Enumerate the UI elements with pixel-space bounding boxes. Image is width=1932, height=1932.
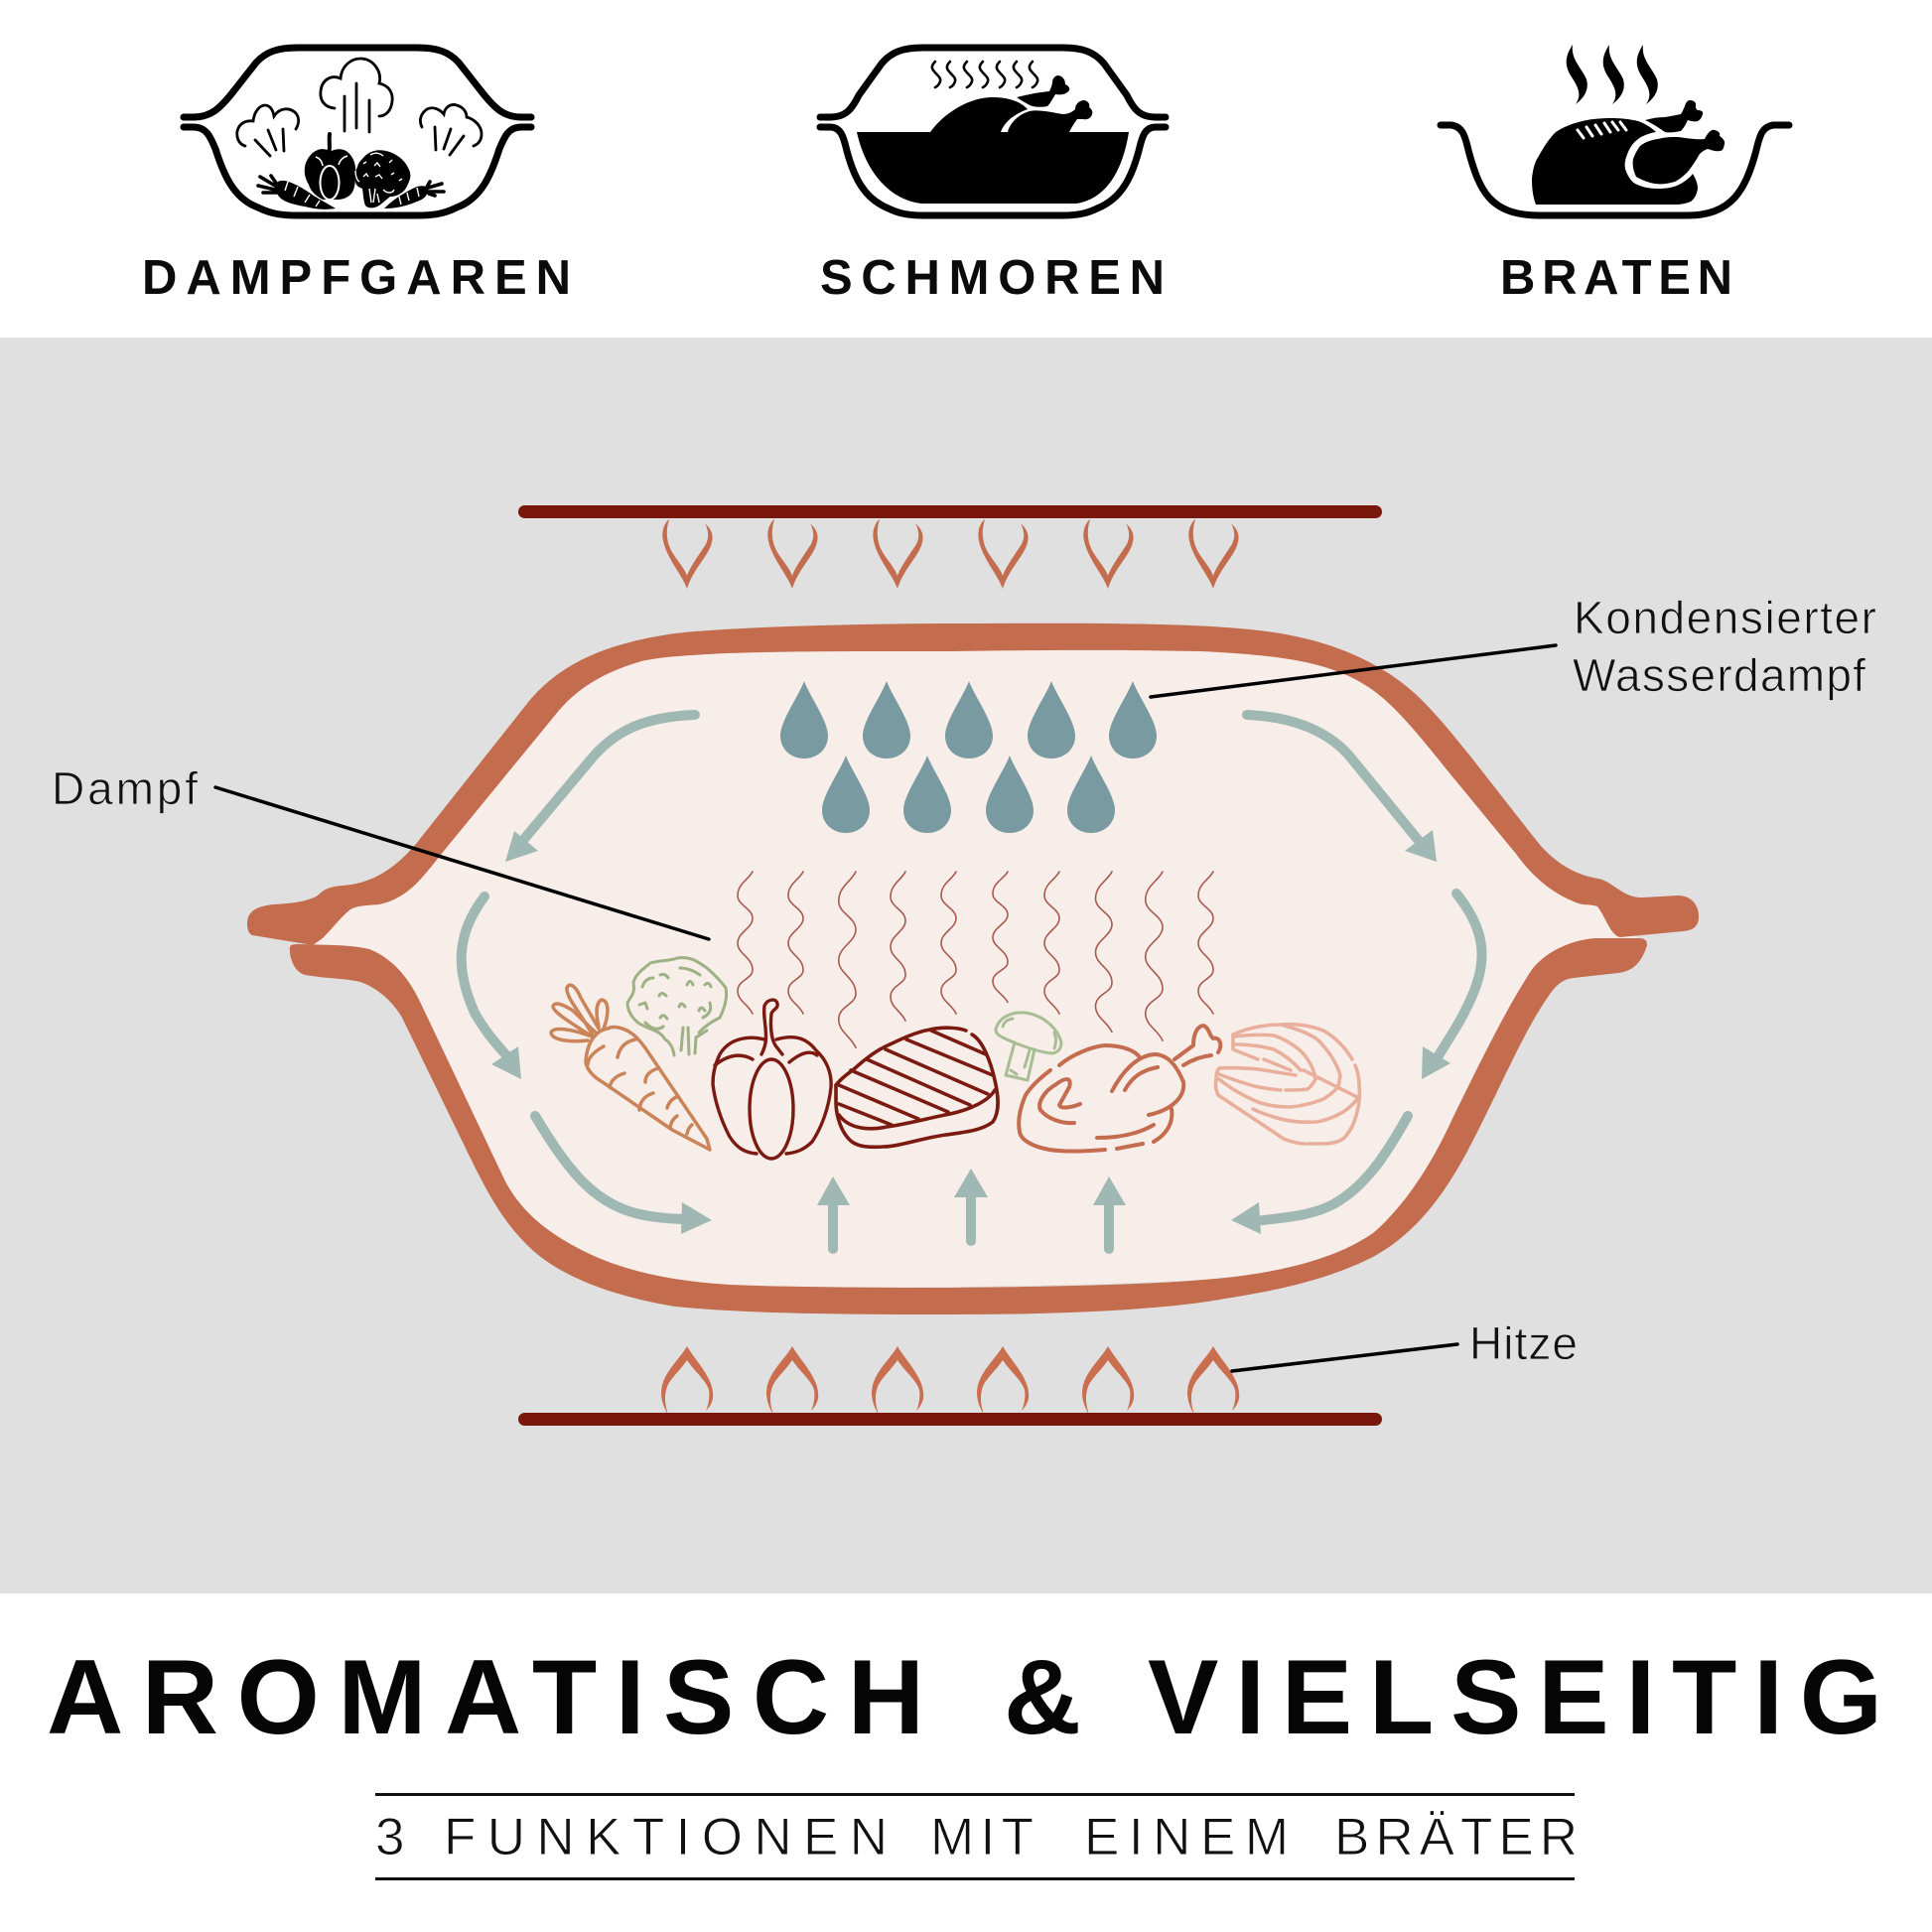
circulation arrows — [462, 715, 1482, 1249]
heading: DAMPFGAREN: DAMPFGAREN — [142, 251, 571, 305]
title: AROMATISCH — [47, 1637, 924, 1756]
food: bell pepper — [713, 1000, 831, 1159]
title: & — [1004, 1637, 1081, 1756]
condensed water drops — [780, 681, 1157, 833]
bottom flames — [661, 1346, 1239, 1415]
icon part: roast chicken — [1532, 100, 1725, 205]
title: VIELSEITIG — [1148, 1637, 1882, 1756]
title — [47, 1637, 1882, 1756]
icon part: thick steam waves — [1567, 45, 1658, 104]
heading: BRATEN: BRATEN — [1500, 251, 1732, 305]
label: Kondensierter Wasserdampf: Kondensierter — [1574, 592, 1876, 643]
subtitle block: 3 — [375, 1808, 404, 1866]
food: salmon — [1215, 1025, 1359, 1144]
subtitle block: FUNKTIONEN — [444, 1808, 888, 1866]
subtitle block: BRÄTER — [1334, 1808, 1578, 1866]
icon part: vegetables — [258, 134, 444, 209]
panel: gray diagram background — [0, 338, 1932, 1593]
steam waves — [738, 872, 1213, 1047]
top flames — [662, 519, 1239, 589]
icon part: small steam wiggles — [932, 62, 1037, 87]
icon: Braten pan with chicken — [1441, 45, 1789, 215]
pot interior — [313, 638, 1638, 1287]
bottom heating element — [518, 1346, 1382, 1426]
subtitle block — [375, 1793, 1578, 1880]
food: roast chicken — [1019, 1026, 1220, 1152]
label: Dampf: Dampf — [52, 762, 198, 814]
label: Kondensierter Wasserdampf: Wasserdampf — [1573, 649, 1865, 701]
pot lid — [247, 623, 1699, 945]
leader line: Hitze — [1232, 1344, 1457, 1371]
icon part: braising liquid and chicken — [857, 75, 1129, 204]
subtitle block: EINEM — [1084, 1808, 1289, 1866]
icon: Schmoren pot — [820, 48, 1166, 215]
food: mushroom — [996, 1013, 1061, 1080]
food: steak — [836, 1028, 998, 1147]
label: Kondensierter Wasserdampf — [1573, 592, 1876, 701]
leader line: Dampf — [215, 787, 709, 939]
subtitle block: MIT — [930, 1808, 1034, 1866]
label: Hitze: Hitze — [1469, 1317, 1578, 1369]
heading: SCHMOREN: SCHMOREN — [820, 251, 1165, 305]
food: carrot — [551, 985, 710, 1150]
food: broccoli — [627, 958, 727, 1055]
leader line: Kondensierter Wasserdampf — [1151, 645, 1556, 697]
icon: Dampfgaren pot — [184, 48, 531, 215]
top heating element — [518, 505, 1382, 589]
pot body — [290, 938, 1647, 1314]
